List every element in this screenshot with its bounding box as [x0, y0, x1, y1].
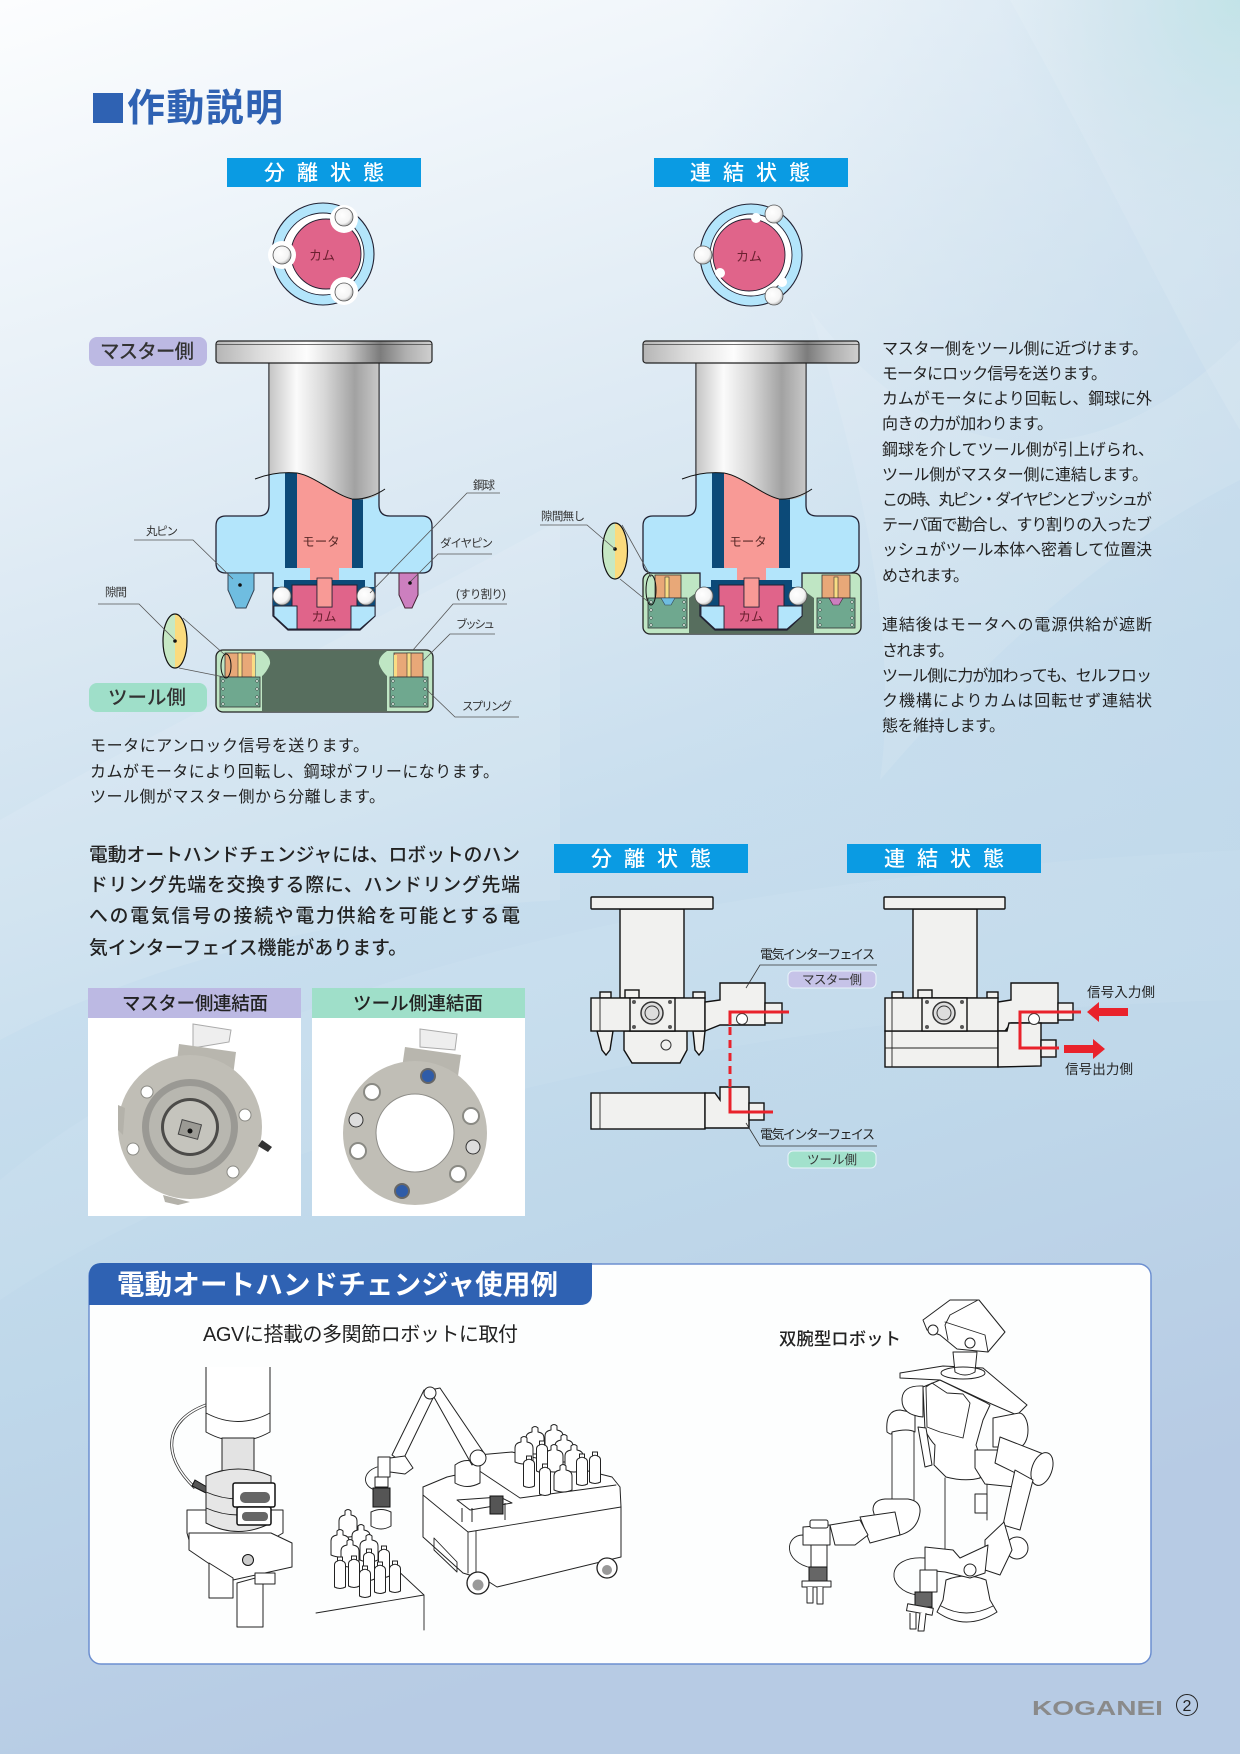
labels: mechanical parts: (すり割り) [456, 588, 506, 601]
panel: tool coupling face [312, 988, 525, 1216]
label: tool side: ツール側 [108, 687, 186, 709]
labels: mechanical parts: ブッシュ [456, 617, 495, 631]
label: signal output side: 信号出力側 [1065, 1062, 1133, 1077]
illustration: hand changer close-up [172, 1367, 292, 1627]
heading tab [89, 1263, 592, 1305]
left arm [789, 1410, 920, 1604]
diagram: cam connected: カム [736, 249, 762, 264]
badge: connected state lower: 連結状態 [884, 848, 1004, 871]
diagram: tool separated [216, 650, 433, 712]
text: connection explanation: モータにロック信号を送ります。 [882, 365, 1107, 383]
base [937, 1576, 997, 1622]
fixture [457, 1497, 512, 1522]
label: tool side [89, 683, 207, 712]
diagram: cam connected [694, 204, 802, 306]
badge: separated state lower [554, 844, 748, 873]
heading tab: 電動オートハンドチェンジャ使用例 [117, 1269, 558, 1300]
right arm [894, 1413, 1057, 1631]
steel balls separated [273, 587, 375, 605]
text: connection explanation: ク機構によりカムは回転せず連結状 [882, 692, 1152, 710]
labels: mechanical parts: 鋼球 [473, 478, 496, 492]
panel: tool coupling face: ツール側連結面 [353, 993, 483, 1014]
text: electrical interface intro [89, 844, 520, 958]
pin: round pin [228, 573, 254, 608]
head [923, 1300, 1005, 1352]
callout: no gap ellipse: 隙間無し [541, 509, 585, 523]
label: electrical interface master [746, 947, 877, 988]
text: connection explanation: カムがモータにより回転し、鋼球に外 [882, 390, 1152, 408]
diagram: master connected [643, 341, 859, 630]
label: signal input side: 信号入力側 [1087, 985, 1155, 1000]
column [945, 1478, 987, 1550]
text: connection explanation: ツール側がマスター側に連結します。 [882, 466, 1148, 484]
text: separation explanation [90, 737, 499, 806]
diagram: master separated [216, 341, 432, 630]
callout: no gap ellipse [540, 509, 651, 604]
labels: mechanical parts: ダイヤピン [440, 536, 493, 550]
badge: connected state lower [847, 844, 1041, 873]
page number: 2 [1183, 1698, 1192, 1715]
text: connection explanation: テーパ面で勘合し、すり割りの入ったブ [882, 515, 1152, 534]
tool connected details [646, 575, 855, 628]
badge: connected state: 連結状態 [690, 162, 810, 185]
text: connection explanation: マスター側をツール側に近づけます。 [882, 340, 1148, 358]
text: separation explanation: カムがモータにより回転し、鋼球がフリーになります。 [90, 763, 499, 781]
illustration: dual arm robot [789, 1300, 1057, 1631]
labels: mechanical parts [98, 478, 519, 717]
diagram: tool connected [643, 573, 861, 634]
diagram: electrical interface connected [884, 897, 1081, 1067]
photo: master face [118, 1024, 272, 1205]
text: connection explanation: ッシュがツール本体へ密着して位置決 [882, 541, 1152, 559]
signal line: red [1020, 1012, 1081, 1048]
diagram: cam separated [268, 203, 374, 305]
text: electrical interface intro: 気インターフェイス機能があります。 [89, 937, 407, 958]
cart bottles [515, 1424, 600, 1496]
text: electrical interface intro: への電気信号の接続や電力供給を可能とする電 [89, 905, 520, 926]
text: connection explanation: 態を維持します。 [882, 717, 1005, 735]
labels: mechanical parts: スプリング [462, 699, 512, 713]
caption: AGV robot: AGVに搭載の多関節ロボットに取付 [203, 1323, 518, 1346]
text: electrical interface intro: 電動オートハンドチェンジャには、ロボットのハン [89, 844, 520, 865]
shoulder plate [900, 1366, 1027, 1415]
badge: separated state lower: 分離状態 [591, 848, 711, 871]
text: connection explanation: ツール側に力が加わっても、セルフロッ [882, 667, 1152, 685]
illustration: AGV mounted robot [316, 1387, 621, 1630]
page number [1176, 1694, 1198, 1716]
photo: tool face [343, 1029, 487, 1205]
left shoulder [902, 1386, 923, 1417]
arrow: signal input [1087, 1002, 1128, 1022]
signal line: red [730, 1012, 789, 1112]
labels: mechanical parts: 丸ピン [146, 525, 178, 538]
caption: dual arm robot: 双腕型ロボット [779, 1329, 901, 1349]
torso [923, 1380, 990, 1480]
table and bottles [316, 1510, 424, 1630]
label: master side: マスター側 [100, 341, 194, 363]
label: electrical interface tool [746, 1123, 877, 1168]
cart [423, 1452, 621, 1587]
text: connection explanation: 連結後はモータへの電源供給が遮断 [882, 616, 1152, 634]
label: electrical interface tool: ツール側 [807, 1153, 857, 1167]
label: master side [89, 337, 207, 366]
pin: diamond pin [399, 573, 418, 608]
diagram: cam separated: カム [309, 248, 335, 263]
arm [455, 1460, 480, 1486]
text: connection explanation: 鋼球を介してツール側が引上げられ、 [882, 441, 1154, 459]
label: electrical interface master: マスター側 [802, 973, 862, 987]
text: connection explanation: 向きの力が加わります。 [882, 415, 1053, 433]
footer logo: KOGANEI [1032, 1697, 1163, 1720]
text: electrical interface intro: ドリング先端を交換する際に、ハンドリング先端 [89, 874, 520, 895]
label: electrical interface master: 電気インターフェイス [760, 947, 875, 962]
text: connection explanation: この時、丸ピン・ダイヤピンとブッシュが [882, 490, 1152, 509]
arrow: signal output [1064, 1039, 1105, 1059]
text: connection explanation: めされます。 [882, 567, 969, 585]
text: separation explanation: モータにアンロック信号を送ります。 [90, 737, 369, 755]
badge: connected state [654, 158, 848, 187]
text: connection explanation: されます。 [882, 642, 954, 660]
text: separation explanation: ツール側がマスター側から分離します。 [90, 788, 385, 806]
panel: usage examples [89, 1263, 1151, 1664]
panel: master coupling face: マスター側連結面 [122, 993, 268, 1014]
callout: gap ellipse [163, 614, 224, 677]
badge: separated state: 分離状態 [264, 162, 384, 185]
panel: master coupling face [88, 988, 301, 1216]
text: connection explanation [882, 340, 1154, 735]
neck [953, 1352, 977, 1375]
diagram: electrical interface separated [591, 897, 789, 1129]
title: 作動説明 [127, 88, 283, 130]
badge: separated state [227, 158, 421, 187]
labels: mechanical parts: 隙間 [105, 585, 127, 599]
label: electrical interface tool: 電気インターフェイス [760, 1127, 875, 1142]
